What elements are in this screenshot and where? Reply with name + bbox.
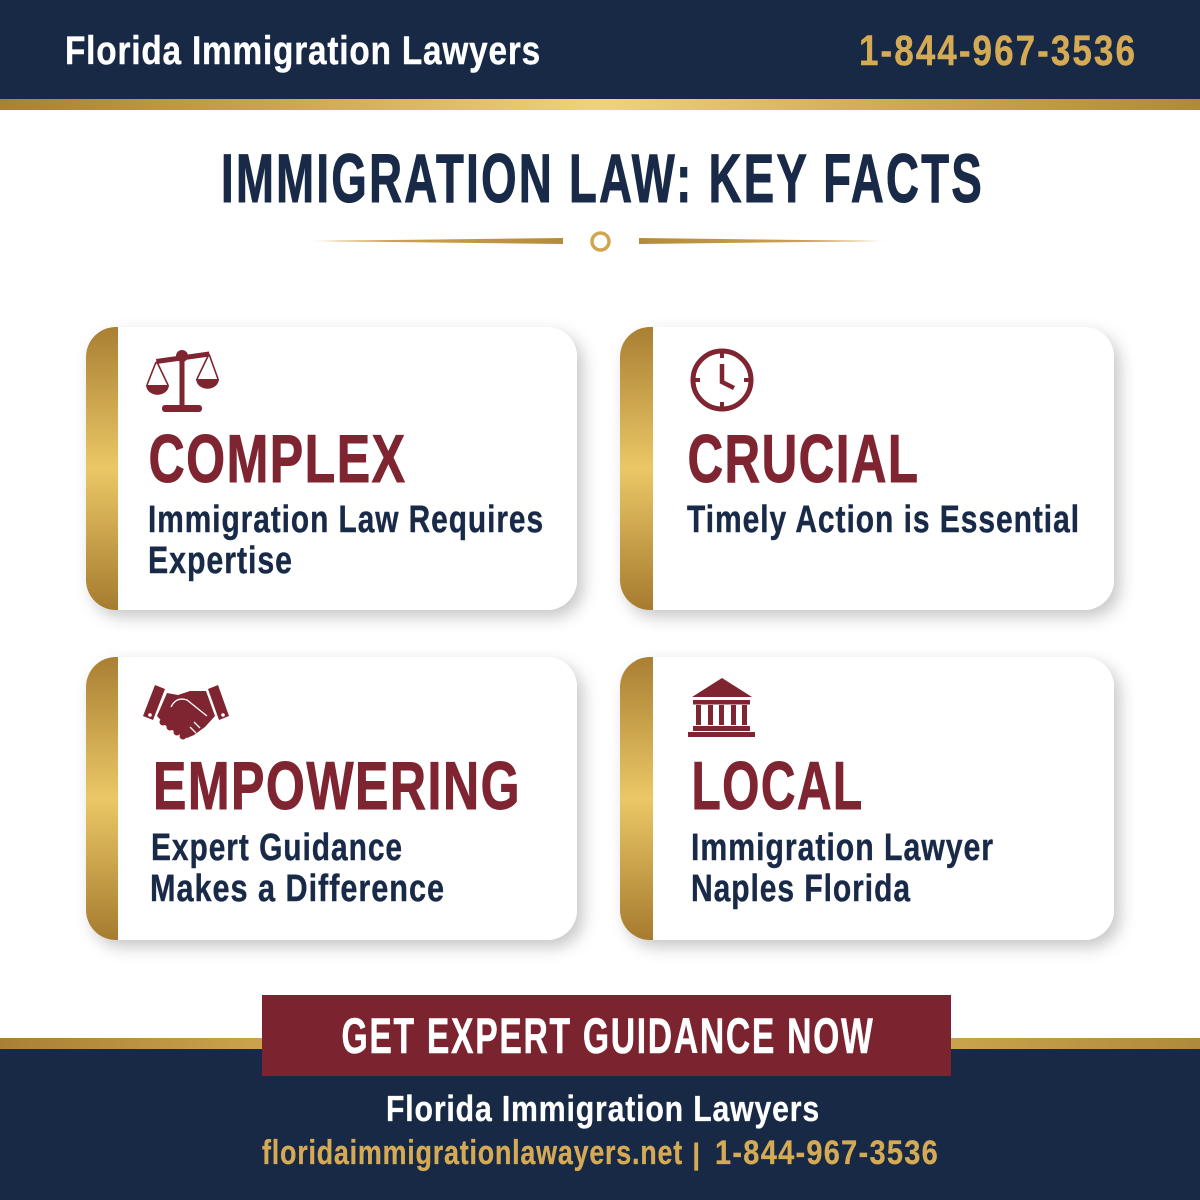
description: Timely Action is Essential — [687, 499, 1080, 541]
phone number: 1-844-967-3536 — [859, 27, 1137, 75]
description — [150, 827, 445, 910]
icon: courthouse — [688, 678, 755, 737]
icon: handshake — [143, 685, 229, 740]
description: Makes a Difference — [150, 868, 445, 910]
title divider — [306, 233, 893, 250]
heading: CRUCIAL — [688, 421, 920, 497]
panel: local — [620, 657, 1114, 940]
heading: LOCAL — [692, 748, 864, 824]
description: Immigration Law Requires — [148, 499, 544, 541]
footer firm name: Florida Immigration Lawyers — [386, 1088, 820, 1129]
call to action banner: GET EXPERT GUIDANCE NOW — [342, 1008, 874, 1064]
description: Expert Guidance — [151, 827, 403, 869]
description: Naples Florida — [691, 868, 911, 910]
footer contact line: | — [692, 1138, 700, 1171]
firm name: Florida Immigration Lawyers — [65, 29, 541, 73]
footer contact line: 1-844-967-3536 — [715, 1134, 939, 1172]
heading: EMPOWERING — [153, 748, 521, 824]
description: Immigration Lawyer — [691, 827, 994, 869]
panel: complex — [86, 327, 577, 610]
panel: empowering — [86, 657, 577, 940]
call to action banner — [262, 995, 951, 1076]
description: Expertise — [148, 540, 293, 582]
description — [148, 499, 544, 582]
description — [691, 827, 994, 910]
icon: clock — [693, 351, 751, 409]
footer contact line: floridaimmigrationlawayers.net — [262, 1134, 683, 1172]
panel: crucial — [620, 327, 1114, 610]
icon: scales — [146, 350, 219, 412]
heading: COMPLEX — [148, 421, 406, 497]
header bar — [0, 0, 1200, 110]
footer — [0, 995, 1200, 1200]
